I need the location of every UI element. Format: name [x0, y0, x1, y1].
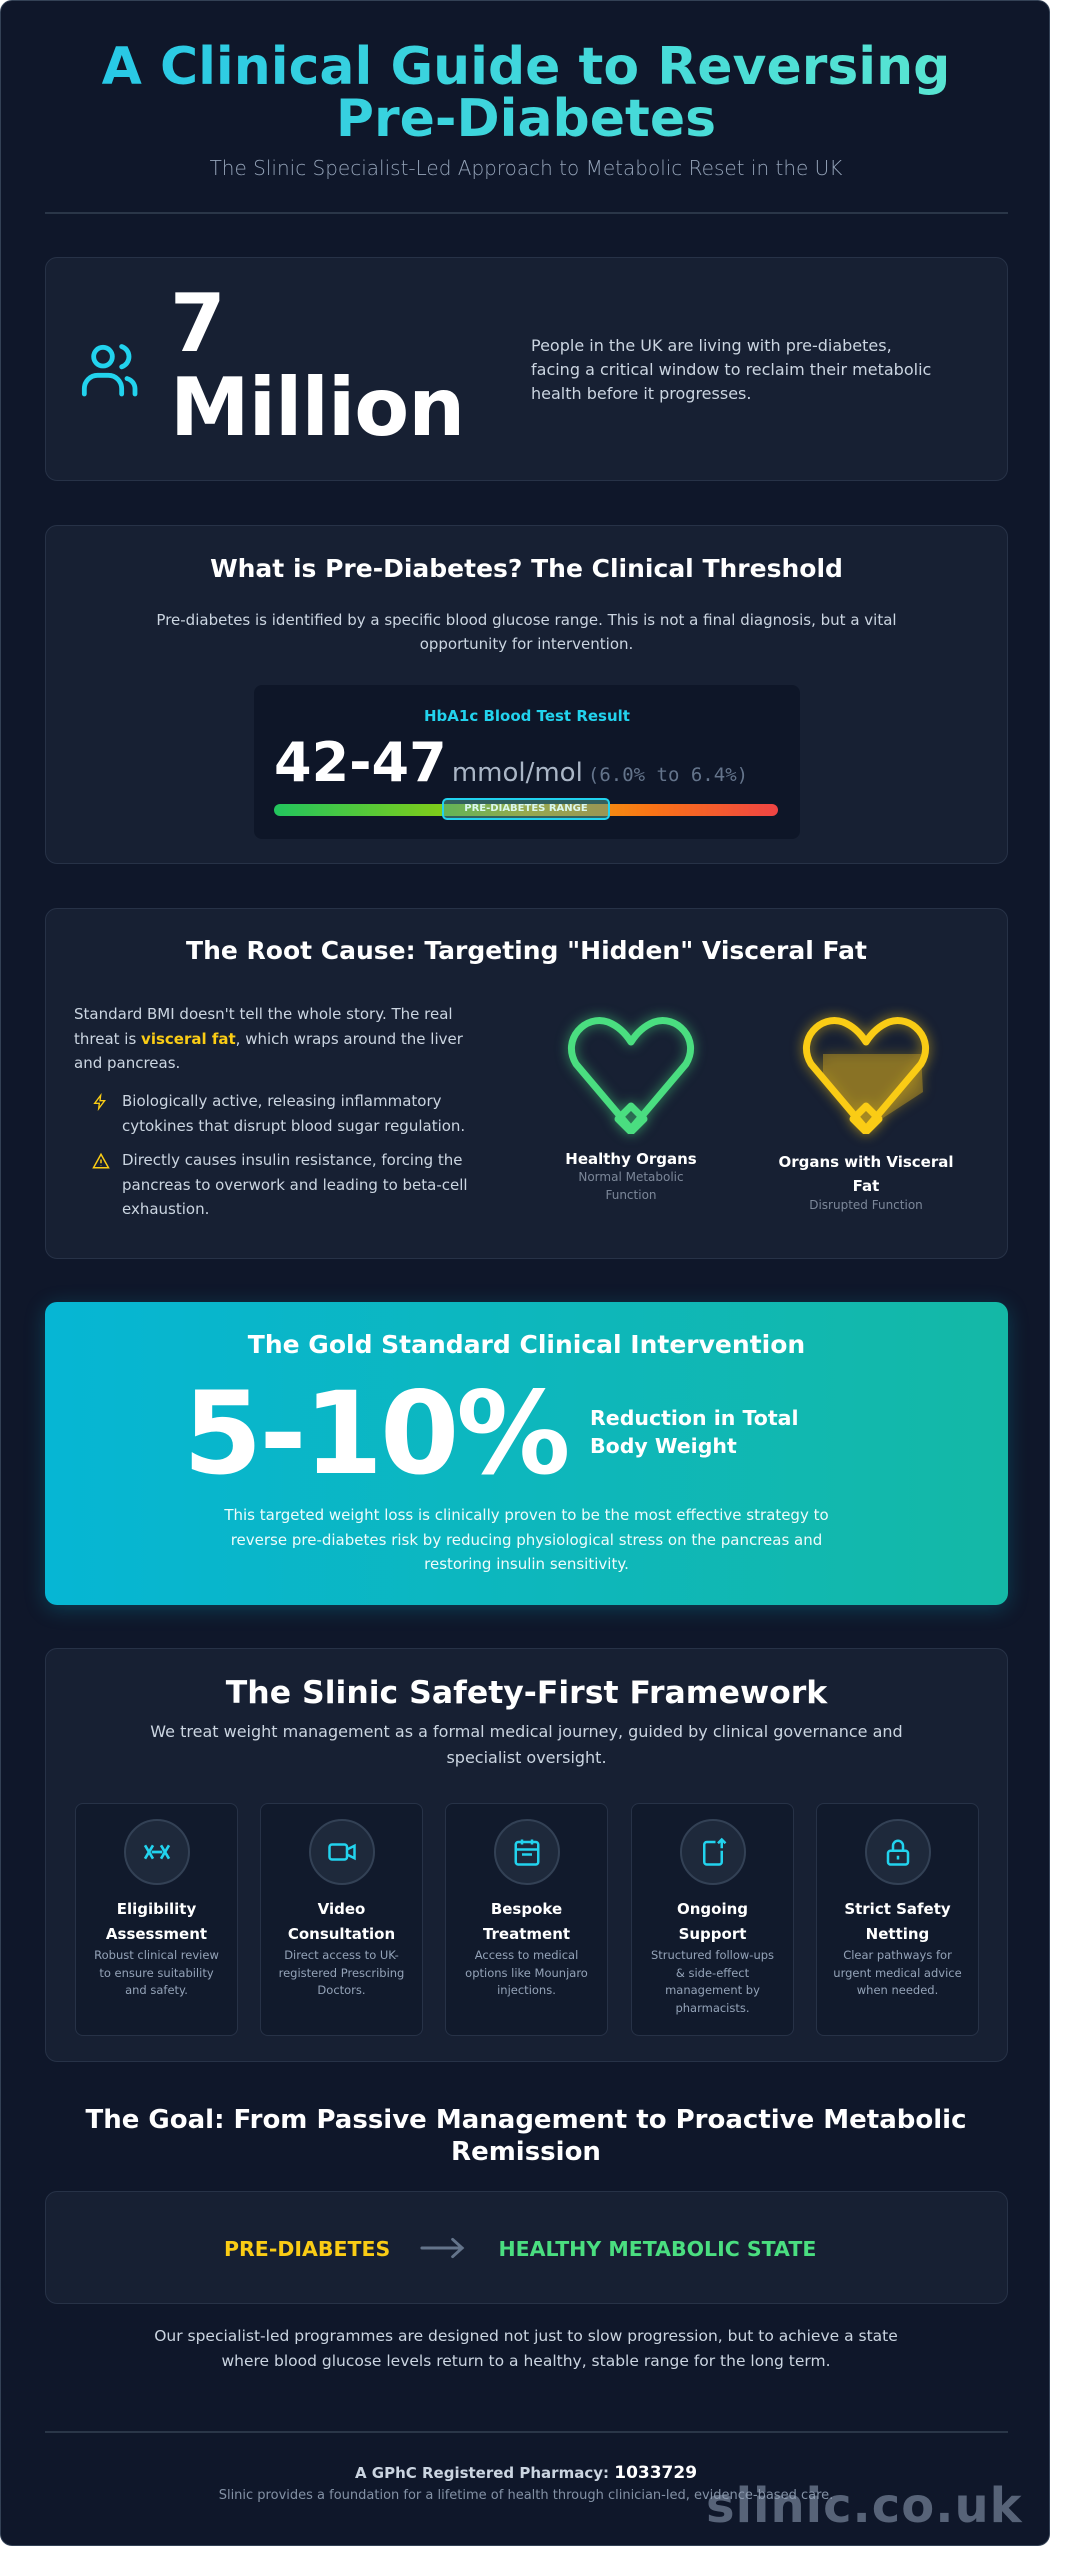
card: bespoke: Access to medical options like Mounjaro injections. — [465, 1948, 588, 1997]
stat label: Body Weight — [590, 1434, 737, 1458]
footer — [219, 2463, 833, 2503]
icon: people — [82, 344, 138, 396]
card: ongoing: Ongoing — [677, 1900, 748, 1918]
subtitle: We treat weight management as a formal medical journey, guided by clinical governance and specialist oversight. — [150, 1722, 903, 1767]
transition labels and arrow: PRE-DIABETES HEALTHY METABOLIC STATE — [224, 2237, 816, 2261]
title: Pre-Diabetes — [336, 89, 716, 149]
icon: healthy heart: Healthy Organs — [565, 1150, 697, 1168]
range bar — [274, 804, 778, 816]
card: eligibility: Robust clinical review to ensure suitability and safety. — [94, 1948, 219, 1997]
heading: The Gold Standard Clinical Intervention — [248, 1330, 805, 1359]
card: ongoing — [631, 1803, 794, 2036]
card: video: Video — [318, 1900, 365, 1918]
stat number: 7 — [170, 277, 225, 370]
card: safety netting: Netting — [866, 1925, 929, 1943]
subtitle: The Slinic Specialist-Led Approach to Metabolic Reset in the UK — [210, 156, 842, 180]
card: safety netting — [816, 1803, 979, 2036]
heading: the goal: The Goal: From Passive Management to Proactive Metabolic Remission — [85, 2105, 966, 2167]
stat description: People in the UK are living with pre-diabetes, facing a critical window to reclaim their metabolic health before it progresses. — [531, 336, 931, 403]
gauge: HbA1c: 42-47 mmol/mol (6.0% to 6.4%) — [274, 731, 748, 794]
card: bespoke — [445, 1803, 608, 2036]
card: safety netting: Clear pathways for urgent medical advice when needed. — [833, 1948, 962, 1997]
icon: visceral fat heart: Disrupted Function — [809, 1198, 923, 1212]
card: video — [260, 1803, 423, 2036]
text: goal description: Our specialist-led programmes are designed not just to slow progression, but to achieve a state where blood glucose levels return to a healthy, stable range for the long term. — [154, 2327, 898, 2370]
big stat: 5-10% — [183, 1367, 568, 1500]
watermark: slinic.co.uk — [706, 2478, 1023, 2534]
card: eligibility — [75, 1803, 238, 2036]
panel: transition — [45, 2191, 1008, 2304]
stat number — [170, 277, 464, 454]
gauge: HbA1c: HbA1c Blood Test Result — [424, 707, 630, 725]
card: bespoke: Bespoke — [491, 1900, 562, 1918]
panel: visceral fat — [45, 908, 1008, 1259]
stat number: Million — [170, 361, 464, 454]
badge: pre-diabetes range: PRE-DIABETES RANGE — [464, 803, 588, 814]
icon: healthy heart: Normal Metabolic Function — [578, 1170, 684, 1202]
footer: A GPhC Registered Pharmacy: 1033729 — [355, 2463, 697, 2483]
card: safety netting: Strict Safety — [844, 1900, 951, 1918]
text: This targeted weight loss is clinically proven to be the most effective strategy to reverse pre-diabetes risk by reducing physiological stress on the pancreas and restoring insulin sensitivity. — [224, 1506, 829, 1573]
card: video: Consultation — [288, 1925, 395, 1943]
gauge: HbA1c — [254, 685, 800, 839]
card: eligibility: Assessment — [106, 1925, 207, 1943]
badge: pre-diabetes range — [442, 798, 610, 820]
heading: What is Pre-Diabetes? The Clinical Threshold — [210, 554, 843, 583]
text: Pre-diabetes is identified by a specific blood glucose range. This is not a final diagnosis, but a vital opportunity for intervention. — [156, 611, 897, 653]
card: bespoke: Treatment — [483, 1925, 570, 1943]
icon: visceral fat heart: Organs with Visceral Fat — [778, 1153, 954, 1195]
heading: The Slinic Safety-First Framework — [226, 1675, 827, 1711]
card: ongoing: Support — [679, 1925, 746, 1943]
icon: healthy heart — [560, 1010, 702, 1202]
text block: Standard BMI doesn't tell the whole story. The real threat is visceral fat, which wraps around the liver and pancreas. — [74, 1005, 463, 1072]
footer: Slinic provides a foundation for a lifetime of health through clinician-led, evidence-based care. — [219, 2488, 833, 2503]
title — [1, 41, 1051, 145]
panel: gold standard intervention — [45, 1302, 1008, 1605]
card: eligibility: Eligibility — [117, 1900, 196, 1918]
card: ongoing: Structured follow-ups & side-effect management by pharmacists. — [651, 1948, 774, 2014]
title: A Clinical Guide to Reversing — [102, 37, 950, 97]
panel: safety-first framework — [45, 1648, 1008, 2062]
stat label — [590, 1406, 799, 1458]
bullet: insulin resistance: Directly causes insulin resistance, forcing the pancreas to overwork and leading to beta-cell exhaustion. — [122, 1151, 468, 1218]
stat label: Reduction in Total — [590, 1406, 799, 1430]
icon: visceral fat heart — [778, 1009, 954, 1212]
bullet: inflammatory: Biologically active, releasing inflammatory cytokines that disrupt blood sugar regulation. — [122, 1092, 465, 1134]
panel: 7 million stat — [45, 257, 1008, 481]
card: video: Direct access to UK-registered Prescribing Doctors. — [279, 1948, 404, 1997]
panel: clinical threshold — [45, 525, 1008, 864]
heading: The Root Cause: Targeting "Hidden" Visceral Fat — [186, 936, 867, 965]
